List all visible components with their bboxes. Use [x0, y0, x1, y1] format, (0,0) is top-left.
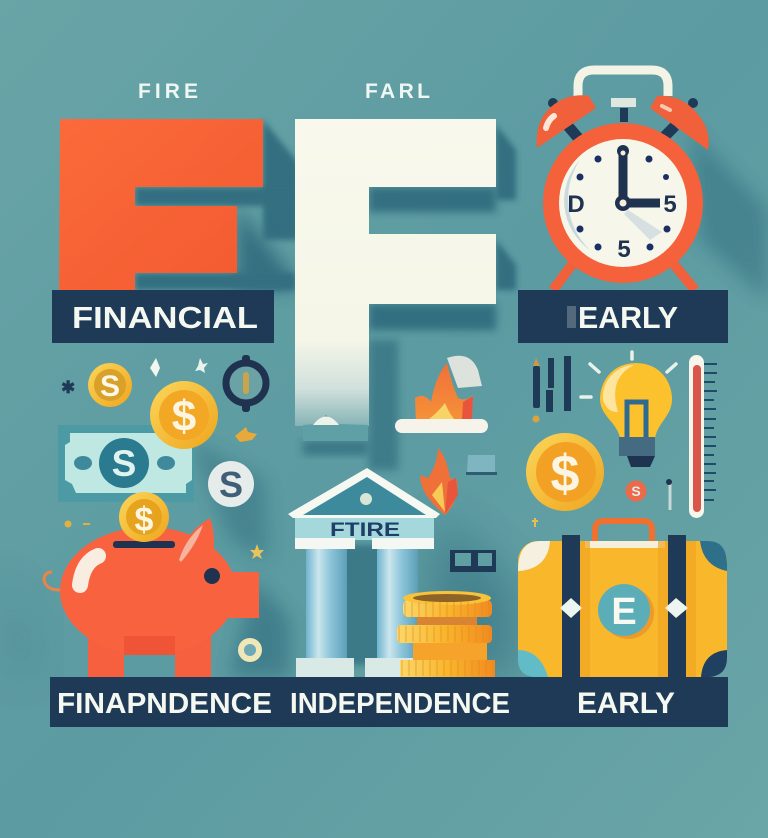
- clock striker: [611, 98, 636, 107]
- clock hands: [623, 150, 660, 203]
- clock numerals: 5: [617, 236, 631, 263]
- icon: flame on cloud: [395, 356, 488, 433]
- heading: FIRE: FIRE: [138, 80, 198, 103]
- bulb rays: [581, 352, 676, 397]
- white F base notch: [303, 415, 368, 441]
- bank columns: [306, 549, 347, 658]
- label: FINAPNDENCE: FINAPNDENCE: [57, 688, 272, 720]
- pig legs: [88, 630, 211, 677]
- clock numerals: 5: [663, 191, 677, 218]
- icon: silver coin: [208, 461, 254, 507]
- label bar: EARLY top: EARLY: [578, 300, 678, 335]
- clock body: [543, 123, 703, 283]
- clock dots: [576, 156, 670, 250]
- icon: small grey box: [466, 455, 497, 475]
- suitcase handle: [595, 521, 652, 541]
- label bar: FINANCIAL: [52, 290, 274, 343]
- icon: flame on roof: [420, 448, 458, 515]
- bank bases: [296, 658, 354, 677]
- label bar: EARLY top: [518, 290, 728, 343]
- clock bell right: [650, 96, 709, 150]
- cloud behind flame: [447, 356, 482, 388]
- pig highlight: [80, 556, 98, 585]
- icon: tool marks: [532, 356, 571, 422]
- big orange letter F: [59, 119, 263, 292]
- heading: FARL: FARL: [365, 80, 430, 103]
- alarm clock: [537, 70, 709, 290]
- pig body: [60, 527, 236, 655]
- clock face: [559, 139, 687, 267]
- bulb glass: [600, 363, 672, 438]
- icon: big coin: $: [172, 392, 196, 441]
- cast shadows: [0, 120, 768, 677]
- pig snout: [215, 572, 259, 618]
- pig eye: [204, 568, 220, 584]
- icon: orange coin: $: [551, 445, 580, 503]
- label: INDEPENDENCE: INDEPENDENCE: [290, 688, 510, 720]
- suitcase corners: [518, 541, 550, 571]
- label bar: bottom: [50, 677, 728, 727]
- icon: bank building: [288, 468, 440, 677]
- icon: small badge: [238, 638, 262, 662]
- suitcase body: [518, 541, 727, 677]
- small star marks: [61, 358, 264, 559]
- icon: coin above piggy bank: $: [135, 501, 154, 539]
- icon: red badge: [626, 480, 646, 502]
- icon: suitcase: [518, 521, 727, 677]
- icon: thermometer: [689, 355, 717, 518]
- icon: coin stack: [397, 591, 495, 677]
- clock numerals: D: [567, 191, 585, 218]
- icon: small coin: [88, 363, 132, 407]
- clock bell posts: [568, 126, 675, 146]
- label bar: FINANCIAL: FINANCIAL: [72, 300, 258, 335]
- small pin marks: [532, 479, 672, 527]
- icon: small coin: S: [100, 370, 120, 403]
- clock handle: [578, 70, 668, 96]
- clock legs: [553, 262, 695, 290]
- icon: piggy bank: [44, 518, 259, 677]
- clock numerals: [567, 191, 677, 263]
- bulb filament: [627, 402, 646, 437]
- suitcase buckles: [560, 598, 582, 618]
- bank sign: FTIRE: [330, 520, 400, 541]
- icon: big coin: [150, 381, 218, 449]
- bank lintels: [295, 538, 355, 549]
- pig tail: [44, 572, 60, 590]
- icon: banknote: S: [112, 443, 136, 484]
- pig slot: [113, 541, 175, 548]
- bank frieze: [295, 517, 434, 540]
- suitcase straps: [562, 535, 580, 677]
- bank roof: [288, 468, 440, 518]
- small star marks: ✱: [61, 378, 75, 397]
- pig ear: [178, 518, 214, 564]
- icon: keyhole ring: [226, 355, 266, 412]
- icon: suitcase: E: [611, 591, 637, 633]
- cloud base: [395, 419, 488, 433]
- label: EARLY bottom: EARLY: [577, 687, 675, 720]
- icon: dark box: [450, 550, 496, 572]
- icon: orange coin: [526, 433, 604, 511]
- icon: red badge: S: [631, 483, 641, 499]
- icon: banknote: [58, 425, 194, 502]
- icon: light bulb: [581, 352, 676, 467]
- flame: [415, 363, 473, 423]
- clock bell left: [537, 95, 596, 148]
- big white letter F: [295, 119, 496, 426]
- icon: coin above piggy bank: [119, 492, 169, 542]
- icon: silver coin: S: [219, 464, 243, 505]
- bulb base: [619, 437, 655, 456]
- suitcase emblem: [602, 587, 654, 639]
